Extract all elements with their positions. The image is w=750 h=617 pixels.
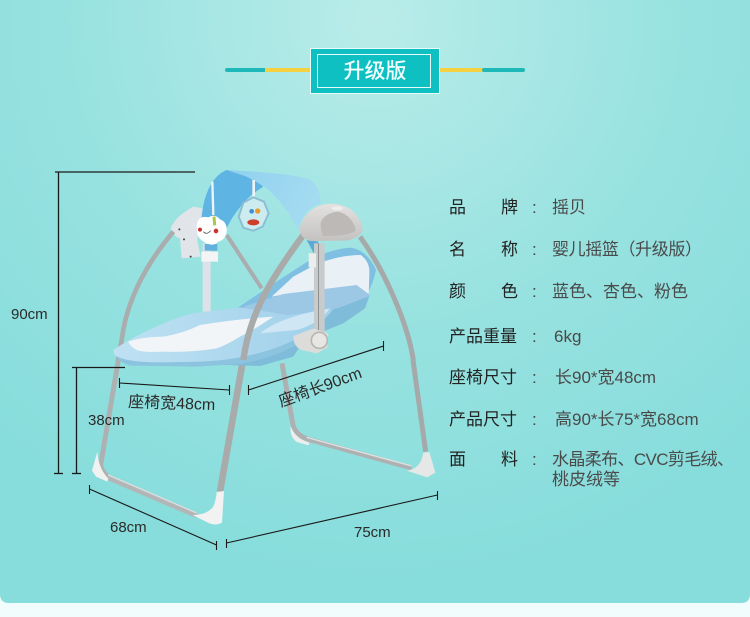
swing upper frame and seat — [113, 170, 413, 367]
dimension labels — [11, 306, 391, 541]
banner right line — [440, 68, 523, 72]
banner box — [310, 48, 440, 94]
seat inner cushion right — [260, 308, 330, 333]
seat shell rim — [197, 248, 376, 362]
canopy outer — [227, 170, 321, 230]
label: seat length: 座椅长90cm — [276, 364, 364, 411]
title banner — [227, 48, 523, 94]
label: seat width: 座椅宽48cm — [128, 393, 216, 414]
spec row: weight: 产品重量 — [449, 327, 517, 346]
back right small foot — [290, 426, 309, 445]
spec row: name: 名 — [449, 240, 466, 259]
spec row: color — [449, 282, 688, 301]
pivot hub — [293, 328, 328, 353]
cloud toy — [197, 182, 227, 245]
swing lower frame — [92, 360, 435, 525]
spec row: material: 桃皮绒等 — [552, 470, 620, 489]
spec row: material: 料 — [501, 450, 518, 469]
dimension: seat length 90cm — [248, 341, 384, 395]
spec row: product size: : — [532, 410, 537, 429]
spec row: color: 蓝色、杏色、粉色 — [552, 282, 688, 301]
seat back white liner — [272, 255, 369, 297]
spec row: seat size: 座椅尺寸 — [449, 368, 517, 387]
ring rattle — [239, 180, 269, 231]
spec row: weight: 6kg — [554, 327, 581, 346]
dimension: depth 75cm — [226, 491, 438, 548]
front left foot — [193, 491, 224, 525]
mobile bar — [201, 243, 218, 312]
label: 75cm: 75cm — [354, 524, 391, 541]
right dome hub — [299, 204, 363, 241]
dimension: seat width 48cm — [120, 378, 230, 395]
dimension: seat height 38cm — [72, 367, 125, 474]
spec row: color: 颜 — [449, 282, 466, 301]
seat underside — [197, 296, 369, 366]
canopy flap — [307, 240, 318, 260]
banner text: 升级版 — [344, 60, 406, 83]
front left lower leg — [220, 360, 243, 492]
spec row: seat size: : — [532, 368, 537, 387]
spec row: color: 色 — [501, 282, 518, 301]
dimension lines — [54, 172, 438, 550]
seat base — [113, 307, 333, 364]
back right leg and base — [282, 363, 412, 468]
spec row: brand: 牌 — [501, 198, 518, 217]
spec row: seat size — [449, 368, 656, 387]
spec row: material: 水晶柔布、CVC剪毛绒、 — [552, 450, 734, 469]
left base rail — [105, 474, 197, 515]
front right upper leg — [360, 237, 413, 360]
seat back pad — [243, 285, 370, 317]
label: 38cm: 38cm — [88, 412, 125, 429]
spec row: brand: 品 — [449, 198, 466, 217]
banner inner frame — [318, 54, 430, 88]
canopy inner — [202, 170, 263, 243]
left small foot — [92, 452, 108, 482]
dimension: width 68cm — [90, 485, 216, 550]
spec row: material: : — [532, 450, 537, 469]
back left lower leg — [101, 360, 118, 476]
vertical arm — [309, 243, 325, 332]
spec row: color: : — [532, 282, 537, 301]
spec row: weight — [449, 327, 581, 346]
spec row: name: 称 — [501, 240, 518, 259]
spec row: brand: : — [532, 198, 537, 217]
spec row: name: : — [532, 240, 537, 259]
back right lower leg — [413, 360, 426, 452]
spec row: name: 婴儿摇篮（升级版） — [552, 240, 702, 259]
left hub motor — [171, 207, 203, 258]
back right foot — [407, 452, 435, 477]
spec row: weight: : — [532, 327, 537, 346]
banner left line — [227, 68, 310, 72]
spec row: seat size: 长90*宽48cm — [555, 368, 656, 387]
front left upper leg — [243, 235, 303, 360]
spec row: material: 面 — [449, 450, 466, 469]
spec row: brand: 摇贝 — [552, 198, 586, 217]
seat white cushion — [128, 317, 273, 352]
spec row: brand — [449, 198, 586, 217]
dimension: height 90cm — [54, 172, 195, 474]
back left second arm — [227, 235, 262, 288]
spec row: material — [449, 450, 734, 489]
spec row: name — [449, 240, 702, 259]
label: 90cm: 90cm — [11, 306, 48, 323]
seat bottom rim — [116, 336, 304, 367]
label: 68cm: 68cm — [110, 519, 147, 536]
back left upper leg — [118, 232, 173, 360]
spec row: product size — [449, 410, 699, 429]
spec row: product size: 产品尺寸 — [449, 410, 517, 429]
baby swing illustration — [92, 170, 435, 525]
spec row: product size: 高90*长75*宽68cm — [555, 410, 699, 429]
spec list — [449, 198, 734, 489]
